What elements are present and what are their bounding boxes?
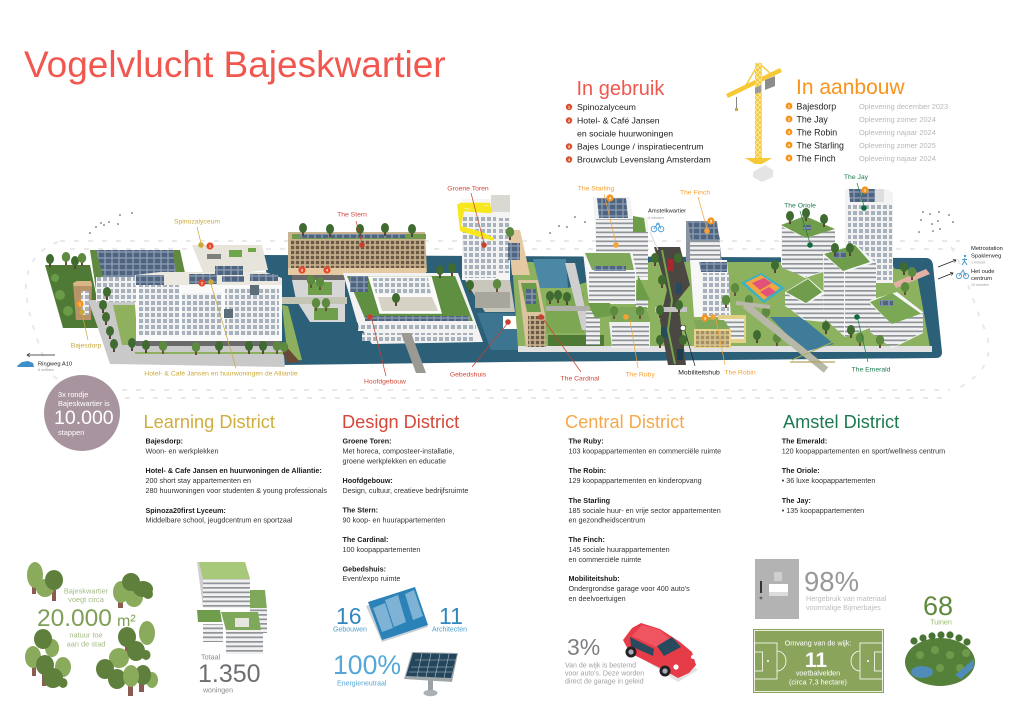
legend: in aanbouw: Oplevering zomer 2024 <box>859 115 936 124</box>
Metrostation and Het oude centrum: Spaklerweg <box>971 254 1001 260</box>
map labels: Groene Toren <box>447 186 489 192</box>
building: The Jay <box>845 189 893 283</box>
stat: 98% hergebruik: voormalige Bijmerbajes <box>806 603 881 612</box>
legend: in gebruik: Brouwclub Levenslang Amsterdam <box>577 154 711 164</box>
Amstelkwartier bike route: 4 minuten <box>648 216 664 220</box>
legend: in aanbouw: 4 <box>788 142 791 148</box>
legend: in aanbouw: The Finch <box>796 154 836 164</box>
panel: Amstel District: The Oriole: <box>782 466 820 475</box>
Amstelkwartier bike route: Amstelkwartier <box>648 208 686 214</box>
stat: gebouwen en architecten <box>333 587 467 642</box>
stat: 20.000 m2 natuur: m² <box>117 613 136 630</box>
panel: Central District: Mobiliteitshub: <box>568 574 620 583</box>
panel: Design District: The Stern: <box>342 506 378 514</box>
stat: 1.350 woningen: 1.350 <box>198 660 261 688</box>
building: The Finch <box>686 221 731 317</box>
panel: Design District <box>342 412 468 583</box>
stat: 1.350 woningen <box>197 562 267 694</box>
callout: 10.000 stappen <box>44 375 120 451</box>
panel: Learning District: Hotel- & Cafe Jansen en huurwoningen de Alliantie: <box>146 466 322 475</box>
legend: in gebruik: en sociale huurwoningen <box>577 128 673 138</box>
map markers: 3 <box>301 268 304 272</box>
stat: gebouwen en architecten: Gebouwen <box>333 626 367 634</box>
land: Bajesdorp park <box>45 252 103 328</box>
panel: Design District: Design District <box>342 412 459 432</box>
panel: Design District: Event/expo ruimte <box>342 574 400 583</box>
icon: garden <box>905 631 975 686</box>
building: The Stern <box>288 223 427 280</box>
stat: 3% auto's: 3% <box>567 634 600 660</box>
building: Spinozalyceum <box>173 245 268 277</box>
panel: Design District: 100 koopappartementen <box>342 545 420 554</box>
building: The Cardinal <box>506 227 546 347</box>
legend: in gebruik: 2 <box>568 118 571 123</box>
map markers: 2 <box>864 188 867 192</box>
map labels: Mobiliteitshub <box>678 370 720 376</box>
stat: 3% auto's: voor auto's. Deze worden <box>565 670 644 678</box>
legend: in gebruik: Hotel- & Café Jansen <box>577 116 660 126</box>
legend: in aanbouw <box>786 76 948 164</box>
stat: 68 tuinen: Tuinen <box>930 618 952 626</box>
map labels: Spinozalyceum <box>174 218 220 226</box>
stat: gebouwen en architecten: 16 <box>336 603 362 629</box>
map labels: The Robin <box>724 370 756 376</box>
panel: Learning District: Learning District <box>144 412 275 432</box>
Amstelkwartier bike route <box>648 208 686 232</box>
map labels <box>71 174 891 386</box>
icon: blueprint <box>366 587 428 642</box>
stat: 11 voetbalvelden <box>753 629 884 693</box>
panel: Central District: The Ruby: <box>568 436 604 446</box>
legend: in aanbouw: Bajesdorp <box>796 102 836 112</box>
panel: Design District: 90 koop- en huurappartementen <box>342 516 445 524</box>
road with cars <box>651 247 690 365</box>
panel: Central District <box>565 412 721 603</box>
building: The Ruby <box>609 306 650 348</box>
map markers: 2 <box>201 280 204 286</box>
isometric map of the district <box>45 189 942 373</box>
legend: in aanbouw: In aanbouw <box>796 76 905 99</box>
map labels: The Cardinal <box>561 376 600 382</box>
building: The Starling <box>583 197 650 345</box>
Metrostation and Het oude centrum <box>938 246 1003 287</box>
stat: 98% hergebruik: 98% <box>804 566 859 597</box>
map labels: The Starling <box>578 186 615 192</box>
icon: red car <box>623 623 698 682</box>
panel: Central District: Central District <box>565 412 684 432</box>
building: The Emerald <box>823 243 876 337</box>
map labels: Bajesdorp <box>71 342 102 350</box>
panel: Amstel District: The Jay: <box>782 496 811 505</box>
panel: Learning District: 280 huurwoningen voor studenten & young professionals <box>146 486 327 495</box>
map markers: 3 <box>704 316 707 320</box>
stat: 11 voetbalvelden: Omvang van de wijk: <box>785 638 851 648</box>
stat: 20.000 m2 natuur: natuur toe <box>69 630 103 640</box>
stat: 20.000 m2 natuur: Bajeskwartier <box>64 586 109 596</box>
legend: in aanbouw: Oplevering najaar 2024 <box>859 128 936 137</box>
icon: trees <box>25 562 158 696</box>
stat: 20.000 m2 natuur: voegt circa <box>68 595 105 604</box>
footprint route around the district <box>26 241 989 398</box>
legend: in aanbouw: Oplevering zomer 2025 <box>859 141 936 150</box>
building: Hotel- & Café Jansen <box>99 266 288 355</box>
map labels: Hoofdgebouw <box>364 378 406 386</box>
stat: 100% energieneutraal: 100% <box>333 650 401 680</box>
stat: 11 voetbalvelden: (circa 7,3 hectare) <box>789 678 847 686</box>
map markers: 1 <box>209 244 212 248</box>
stat: 100% energieneutraal: Energieneutraal <box>337 680 387 688</box>
panel: Amstel District: • 36 luxe koopappartementen <box>782 476 875 485</box>
map markers: 4 <box>326 268 329 272</box>
building: Groene Toren <box>457 195 510 280</box>
map markers: 1 <box>79 302 82 306</box>
building: The Oriole <box>781 208 835 322</box>
stat: 3% auto's: direct de garage in geleid <box>565 678 644 686</box>
panel: Central District: The Finch: <box>568 535 605 544</box>
water basin beside The Cardinal <box>533 259 568 288</box>
stat: 1.350 woningen: woningen <box>202 688 233 694</box>
map labels: The Finch <box>680 190 710 196</box>
sports court <box>741 273 785 303</box>
plaza and bridge in front of The Stern <box>282 275 347 322</box>
panel: Central District: 185 sociale huur- en vrije sector appartementen <box>568 506 721 515</box>
bridge and trees to the east <box>822 262 930 348</box>
Ringweg A10: Ringweg A10 <box>38 362 72 368</box>
Ringweg A10 <box>17 353 72 372</box>
map labels: The Stern <box>337 212 367 218</box>
panel: Learning District <box>144 412 327 524</box>
stat: 1.350 woningen: Totaal <box>201 652 221 662</box>
panel: Design District: Met horeca, composteer-installatie, <box>342 446 454 456</box>
map labels: The Jay <box>844 174 869 181</box>
panel: Design District: Design, cultuur, creatieve bedrijfsruimte <box>342 486 468 495</box>
land: central and amstel district <box>512 262 930 347</box>
stat: 68 tuinen: 68 <box>923 591 953 621</box>
building: Hoofdgebouw <box>343 263 483 373</box>
panel: Learning District: Spinoza20first Lyceum: <box>146 506 226 515</box>
legend: in aanbouw: Oplevering najaar 2024 <box>859 154 936 163</box>
stat: 11 voetbalvelden: 11 <box>805 649 827 672</box>
legend: in gebruik: 4 <box>568 157 571 162</box>
panel: Central District: 145 sociale huurappartementen <box>568 545 670 554</box>
panel: Amstel District: Amstel District <box>783 412 899 432</box>
panel: Design District: groene werkplekken en educatie <box>342 456 446 466</box>
panel: Amstel District: The Emerald: <box>782 436 827 446</box>
legend: in aanbouw: 1 <box>788 104 791 108</box>
panel: Design District: Gebedshuis: <box>342 564 386 574</box>
map markers <box>76 186 869 331</box>
legend: in aanbouw: The Starling <box>796 140 844 150</box>
legend: in aanbouw: The Jay <box>796 114 828 124</box>
building: The Robin <box>694 315 746 348</box>
stat: 98% hergebruik <box>755 559 887 619</box>
legend: in aanbouw: 5 <box>788 156 791 160</box>
legend: in gebruik: In gebruik <box>576 78 665 100</box>
callout: 10.000 stappen: Bajeskwartier is <box>58 399 110 408</box>
Metrostation and Het oude centrum: centrum <box>971 276 992 282</box>
stat: 20.000 m2 natuur: 20.000 <box>37 605 112 632</box>
legend: in aanbouw: Oplevering december 2023 <box>859 102 948 111</box>
map labels: Gebedshuis <box>450 372 487 378</box>
stat: 3% auto's: Van de wijk is bestemd <box>565 662 636 670</box>
legend: in gebruik <box>566 78 711 164</box>
stat: 98% hergebruik: Hergebruik van materiaal <box>806 594 887 603</box>
legend: in gebruik: 1 <box>568 104 571 110</box>
birds <box>89 211 954 234</box>
panel: Design District: Hoofdgebouw: <box>342 476 393 485</box>
water <box>263 255 942 365</box>
Metrostation and Het oude centrum: 15 minuten <box>971 283 989 287</box>
callout: 10.000 stappen: stappen <box>58 428 84 437</box>
building: back block with solar roof <box>90 250 184 302</box>
legend: in aanbouw: 3 <box>788 130 791 134</box>
panel: Design District: The Cardinal: <box>342 535 388 544</box>
panel: Amstel District: • 135 koopappartementen <box>782 506 864 515</box>
stat: 20.000 m2 natuur: aan de stad <box>67 640 105 648</box>
panel: Amstel District: 120 koopappartementen en sport/wellness centrum <box>782 446 945 456</box>
Ringweg A10: 6 minuten <box>38 368 54 372</box>
marker leader lines <box>82 183 868 376</box>
panel: Central District: 103 koopappartementen en commerciële ruimte <box>568 446 721 456</box>
panel: Learning District: Bajesdorp: <box>146 436 183 446</box>
panel: Central District: en gezondheidscentrum <box>568 516 645 524</box>
land: ground and lawns hotel <box>88 300 285 367</box>
callout: 10.000 stappen: 3x rondje <box>58 390 88 399</box>
stat: gebouwen en architecten: 11 <box>439 603 463 629</box>
panel: Learning District: Woon- en werkplekken <box>146 446 218 456</box>
map markers: 5 <box>710 218 713 224</box>
legend: in gebruik: Bajes Lounge / inspiratiecentrum <box>577 142 704 152</box>
panel: Central District: The Robin: <box>568 466 606 475</box>
panel: Central District: en commerciële ruimte <box>568 555 641 564</box>
park, canal and diagonal road <box>722 260 835 370</box>
Metrostation and Het oude centrum: Metrostation <box>971 246 1003 252</box>
stat: 3% auto's <box>565 623 698 686</box>
map labels: The Ruby <box>625 372 655 378</box>
stat: 100% energieneutraal <box>333 650 458 696</box>
plaza near Groene Toren <box>465 279 522 350</box>
map labels: The Emerald <box>852 366 891 374</box>
icon: cell door <box>755 559 799 619</box>
crane <box>727 63 781 182</box>
title: Vogelvlucht Bajeskwartier <box>24 44 446 85</box>
legend: in aanbouw: The Robin <box>796 128 837 138</box>
callout: 10.000 stappen: 10.000 <box>54 407 114 429</box>
stat: 11 voetbalvelden: voetbalvelden <box>796 668 840 678</box>
panel: Central District: The Starling <box>568 496 610 505</box>
panel: Learning District: 200 short stay appartementen en <box>146 476 251 485</box>
legend: in gebruik: Spinozalyceum <box>577 102 636 112</box>
map markers: 4 <box>609 196 612 200</box>
Metrostation and Het oude centrum: 1 minuut <box>971 260 985 264</box>
icon: solar panel <box>404 652 458 696</box>
building: low block with roof gardens <box>870 292 923 348</box>
panel: Design District: Groene Toren: <box>342 436 392 446</box>
panel: Central District: en deelvoertuigen <box>568 594 626 603</box>
icon: buildings <box>197 562 267 654</box>
Metrostation and Het oude centrum: Het oude <box>971 269 995 275</box>
panel: Learning District: Middelbare school, jeugdcentrum en sportzaal <box>146 516 293 524</box>
panel: Central District: Ondergrondse garage voor 400 auto's <box>568 584 690 593</box>
legend: in aanbouw: 2 <box>788 116 791 122</box>
stat: 20.000 m2 natuur <box>25 562 158 696</box>
stat: gebouwen en architecten: Architecten <box>432 626 467 634</box>
stat: 68 tuinen <box>905 591 975 686</box>
panel: Amstel District <box>782 412 945 515</box>
map labels: The Oriole <box>784 202 816 210</box>
panel: Central District: 129 koopappartementen en kinderopvang <box>568 476 702 485</box>
legend: in gebruik: 3 <box>568 144 571 149</box>
lawns and trees next to The Starling <box>546 263 604 346</box>
map labels: Hotel- & Café Jansen en huurwoningen de Alliantie <box>144 370 298 378</box>
